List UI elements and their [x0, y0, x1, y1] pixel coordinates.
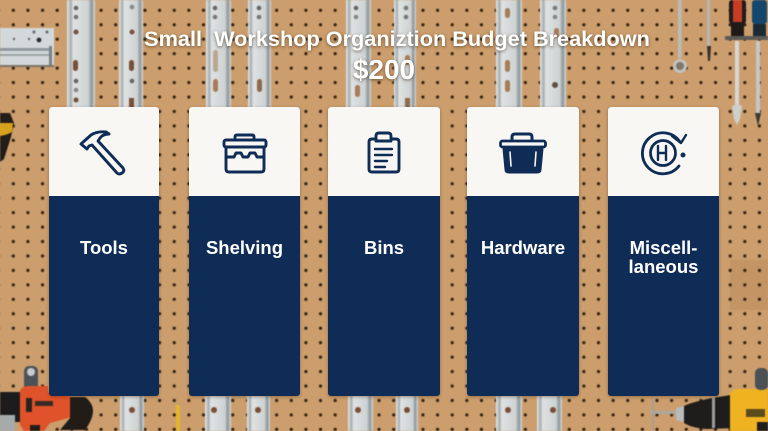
- tool: left yellow handle: [0, 113, 14, 162]
- icon: storage tub: [467, 107, 579, 196]
- panel: bins: [328, 107, 440, 396]
- pencil: [176, 405, 180, 431]
- tool: screwdrivers top right: [725, 0, 768, 126]
- rail slots: [73, 5, 559, 413]
- label: tools: Tools: [80, 237, 128, 258]
- panel: miscellaneous: [608, 107, 719, 396]
- icon: circular arrow: [608, 107, 719, 196]
- label: miscellaneous: [629, 237, 698, 277]
- icon: clipboard bin: [328, 107, 440, 196]
- bracket top left: [0, 28, 54, 67]
- tool: orange drill bottom left: [0, 366, 93, 431]
- icon: hammer: [49, 107, 159, 196]
- icon: toolbox: [189, 107, 300, 196]
- title: Small Workshop Organiztion Budget Breakdown: [144, 26, 650, 51]
- label: miscellaneous: Miscell-: [630, 237, 697, 258]
- tool: wrench top right: [674, 0, 711, 72]
- panel: tools: [49, 107, 159, 396]
- panel: hardware: [467, 107, 579, 396]
- tool: yellow drill bottom right: [650, 368, 768, 431]
- label: bins: Bins: [364, 237, 404, 258]
- budget amount: $200: [353, 54, 415, 85]
- label: hardware: Hardware: [481, 237, 565, 258]
- label: shelving: Shelving: [206, 237, 283, 258]
- panel: shelving: [189, 107, 300, 396]
- rails: [67, 0, 566, 431]
- label: miscellaneous: laneous: [629, 256, 698, 277]
